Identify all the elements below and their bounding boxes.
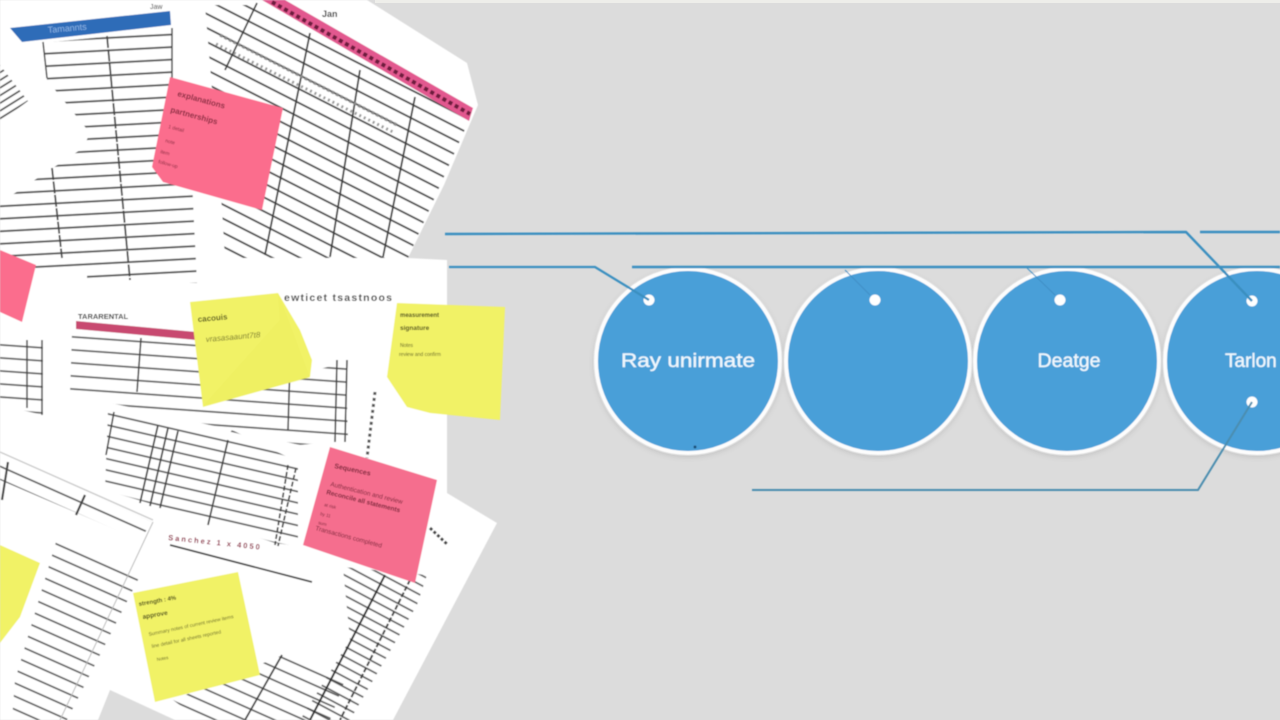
connector: lower line to circle 4 bbox=[752, 402, 1252, 490]
stage circle 1 bbox=[596, 269, 780, 453]
top edge strip bbox=[375, 0, 1280, 3]
sticky note: pink lower: Reconcile all statements bbox=[326, 489, 401, 514]
panel: circular process stages bbox=[445, 232, 1280, 490]
sheet: top-left table bbox=[0, 4, 197, 283]
sticky note: yellow bottom: Notes bbox=[156, 655, 169, 662]
stage circle 2 bbox=[786, 269, 970, 453]
sticky note: yellow middle bbox=[190, 293, 312, 407]
stage circle 3 bbox=[975, 268, 1159, 453]
connector: upper right segment bbox=[1200, 231, 1280, 233]
sticky note: pink top: follow-up bbox=[157, 159, 179, 170]
sheet: bottom-right table bbox=[173, 528, 448, 720]
sticky note: pink lower: sum bbox=[318, 520, 327, 527]
sticky note: yellow right: review and confirm bbox=[399, 352, 441, 358]
sheet: middle table bbox=[70, 292, 392, 458]
sticky note: yellow bottom: line detail for all sheets reported bbox=[151, 629, 222, 650]
sheet: bottom-left table bbox=[0, 452, 153, 720]
sticky note: yellow bottom: strength : 4% bbox=[138, 595, 177, 608]
sheet: top-left table: Tamannts bbox=[47, 22, 88, 35]
sticky note: pink top bbox=[152, 77, 283, 210]
connector: middle long line bbox=[632, 266, 1280, 268]
stage circle 4 bbox=[1165, 269, 1280, 453]
sheet: central tilted table: Sanchez 1 x 4050 bbox=[168, 533, 260, 552]
sticky note: yellow middle: cacouis bbox=[197, 312, 228, 324]
sticky note: yellow middle: vrasasaaunt7t8 bbox=[205, 330, 261, 344]
paper sheets bbox=[0, 0, 497, 720]
sticky note: pink lower: Authentication and review bbox=[330, 481, 404, 506]
sticky note: yellow bottom: approve bbox=[142, 610, 169, 621]
sheet: top-right table: Jan bbox=[322, 9, 338, 19]
sticky note: pink lower: Sequences bbox=[334, 463, 371, 478]
sticky note: pink lower: at risk bbox=[324, 502, 337, 510]
sticky note: yellow bottom bbox=[133, 572, 260, 702]
sticky note: pink lower bbox=[303, 447, 437, 583]
sticky note: yellow right bbox=[387, 303, 505, 420]
sticky note: pink lower: Transactions completed bbox=[314, 525, 383, 550]
sheet: middle table: ewticet tsastnoos bbox=[284, 292, 392, 304]
sheet: central tilted table bbox=[105, 410, 312, 582]
stage circle 4: Tarlon bbox=[1225, 351, 1277, 372]
sheet: middle table: TARARENTAL bbox=[78, 312, 129, 321]
sticky note: yellow right: measurement bbox=[400, 313, 439, 319]
sheet: top-left table: Jaw bbox=[150, 4, 163, 11]
sticky note: pink lower: by 11 bbox=[320, 511, 332, 519]
sticky note: yellow bottom: Summary notes of current review items bbox=[148, 614, 235, 638]
connector: left line to circle 1 bbox=[449, 267, 649, 300]
sheet: top-right table bbox=[205, 0, 473, 258]
sticky note: yellow left bbox=[0, 545, 40, 643]
stage circle 1: Ray unirmate bbox=[621, 351, 755, 372]
sticky note: pink top: partnerships bbox=[169, 105, 219, 127]
sticky note: yellow right: signature bbox=[400, 325, 430, 332]
panel: stack of paper spreadsheets bbox=[0, 0, 505, 720]
stage circle 3: Deatge bbox=[1038, 351, 1100, 372]
sticky note: pink top: explanations bbox=[176, 89, 227, 111]
sticky note: pink left bbox=[0, 250, 36, 322]
sticky note: pink top: item bbox=[159, 149, 170, 157]
sticky note: yellow right: Notes bbox=[400, 343, 414, 349]
connector: upper long line to circle 4 bbox=[445, 232, 1252, 301]
sticky note: pink top: 1 detail bbox=[167, 124, 185, 134]
sheet: left sliver table bbox=[0, 340, 43, 415]
sticky note: pink top: note bbox=[164, 138, 176, 147]
